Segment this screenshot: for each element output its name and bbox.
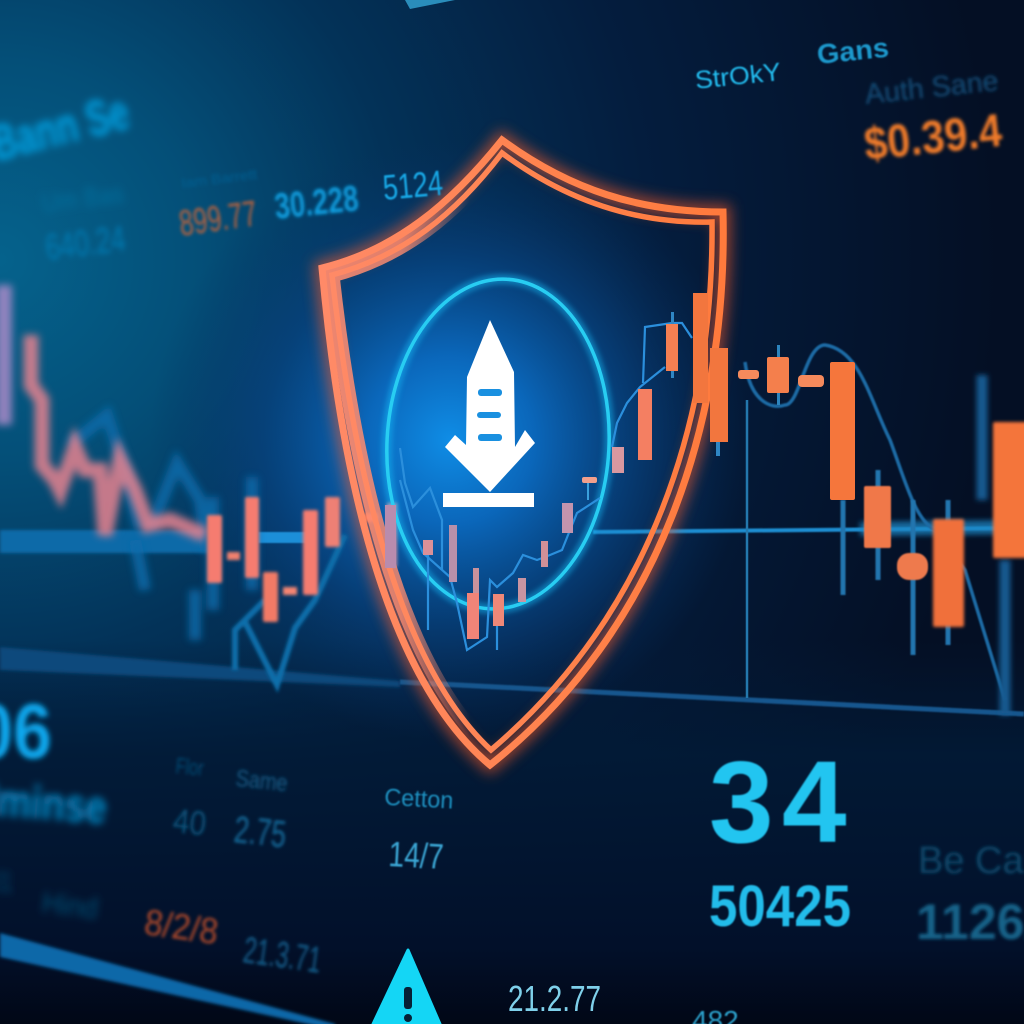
text: bottom left figures	[0, 687, 324, 981]
text: top labels: Gans	[815, 32, 890, 70]
chart: horizontal axis lines	[0, 400, 1024, 1024]
text: bottom left figures: Flor	[174, 753, 205, 781]
text: bottom left figures: 8/2/8	[142, 901, 221, 952]
text: centre bottom figures: Cetton	[384, 784, 454, 815]
text: bottom left figures: 40	[171, 802, 208, 843]
text: top labels: 5124	[381, 164, 444, 208]
text: top labels	[0, 32, 1005, 268]
text: bottom left figures: 2.75	[232, 809, 288, 856]
chart: left blurred line and candlesticks	[0, 285, 397, 685]
chart: right candlesticks and line	[738, 345, 1024, 715]
text: bottom left figures: 21.3.71	[241, 929, 324, 981]
text: bottom left figures: Same	[234, 765, 289, 797]
candlesticks crossing lens	[385, 293, 728, 639]
text: top labels: 899.77	[176, 192, 259, 244]
text: large stat 34: 3	[709, 737, 774, 867]
shield	[322, 140, 723, 765]
text: top labels: Um Bas	[40, 178, 125, 218]
top stray bar	[405, 0, 455, 9]
text: top labels: 30.228	[273, 177, 360, 227]
icon: warning triangle	[373, 950, 440, 1024]
text: top labels: Auth Sane	[863, 65, 1000, 111]
text: large stat 34: 50425	[709, 874, 851, 939]
text: top labels: $0.39.4	[862, 104, 1005, 170]
text: centre bottom figures	[384, 784, 739, 1024]
text: centre bottom figures: 14/7	[388, 835, 445, 877]
text: bottom left figures: Hind	[40, 886, 100, 926]
icon: download arrow	[443, 320, 535, 507]
text: top labels: StrOkY	[694, 58, 782, 95]
text: top labels: 640.24	[43, 217, 127, 268]
text: top labels: Iam Barrett	[180, 166, 258, 191]
chart line inside circle	[400, 323, 692, 650]
text: centre bottom figures: 21.2.77	[508, 978, 601, 1019]
text: large stat 34: 4	[782, 737, 847, 867]
ring	[379, 273, 617, 615]
background glow behind shield	[150, 140, 750, 740]
text: large stat 34	[709, 737, 851, 939]
lens ring with chart inside	[379, 273, 728, 650]
text: right bottom figures	[916, 840, 1024, 950]
background lower dark panel	[0, 640, 1024, 1024]
